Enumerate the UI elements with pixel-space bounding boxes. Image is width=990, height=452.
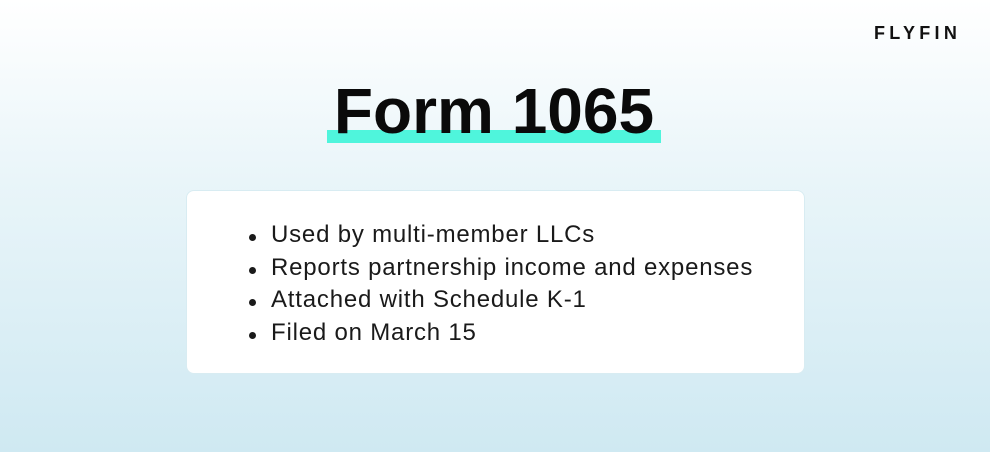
logo: FLYFIN [874, 23, 961, 43]
panel: facts card [186, 190, 805, 374]
bullet list: Attached with Schedule K-1 [271, 286, 587, 313]
title: Form 1065 [334, 75, 654, 147]
bullet list: Filed on March 15 [271, 318, 477, 346]
bullet list [249, 221, 753, 346]
bullet list: Reports partnership income and expenses [271, 254, 753, 280]
bullet list: Used by multi-member LLCs [271, 221, 595, 248]
